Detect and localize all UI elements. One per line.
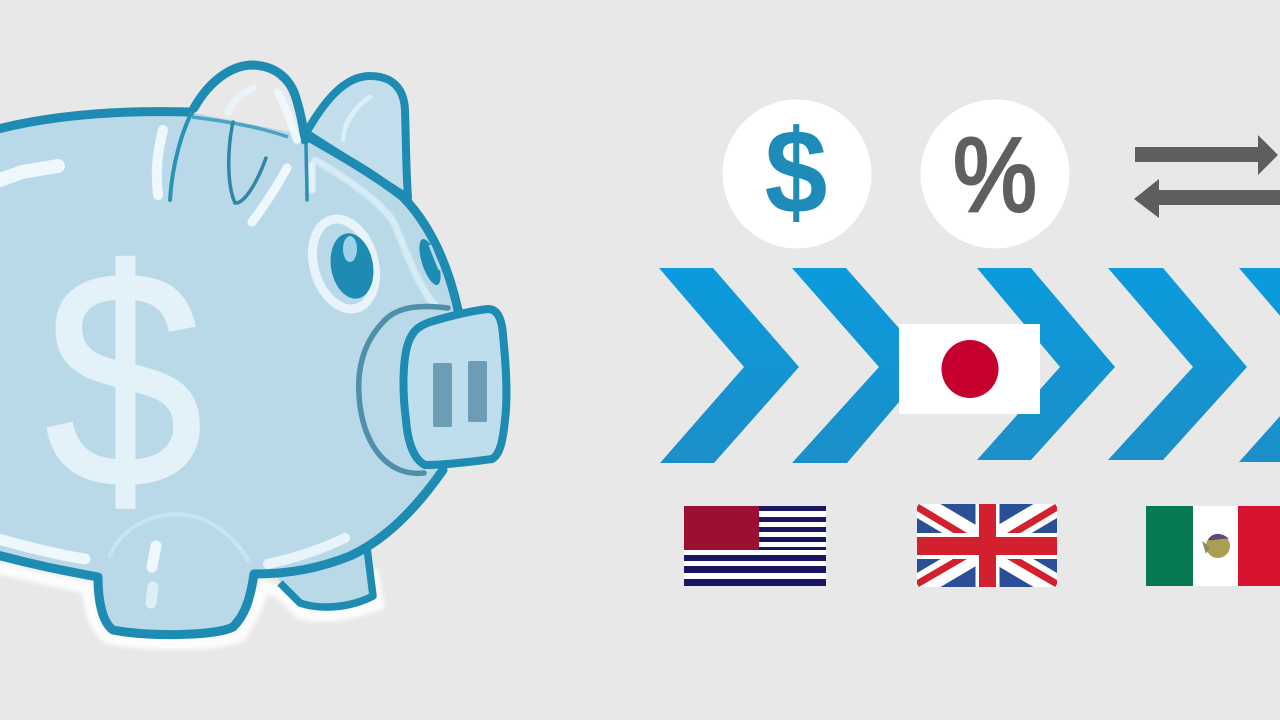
pig near ear (0, 65, 370, 222)
icon: percent circle (920, 100, 1070, 248)
icon: exchange arrows (1134, 135, 1280, 218)
pig body (0, 112, 500, 635)
illustration: glass piggy bank (0, 65, 506, 644)
pig eye (302, 212, 386, 316)
flag: Japan (899, 324, 1040, 414)
pig far eye (415, 237, 445, 287)
pig snout back arc (359, 306, 448, 473)
pig white halo (0, 566, 378, 644)
chevron row (659, 268, 1280, 463)
icon: dollar circle: $ (765, 105, 827, 239)
flag: United Kingdom (917, 504, 1057, 587)
flag: Mexico (1146, 506, 1280, 586)
pig belly highlights (0, 514, 345, 603)
pig body outline (0, 112, 458, 635)
pig body highlights near face (312, 160, 435, 305)
pig nostrils (433, 361, 487, 427)
pig far ear (306, 76, 408, 198)
pig dollar sign: $ (45, 206, 203, 552)
icon: dollar circle (722, 100, 872, 248)
pig snout (404, 309, 506, 465)
flag: United States (684, 506, 826, 586)
icon: percent circle: % (953, 117, 1037, 234)
pig faint back line behind ear (192, 117, 288, 137)
pig hind leg (270, 545, 373, 607)
